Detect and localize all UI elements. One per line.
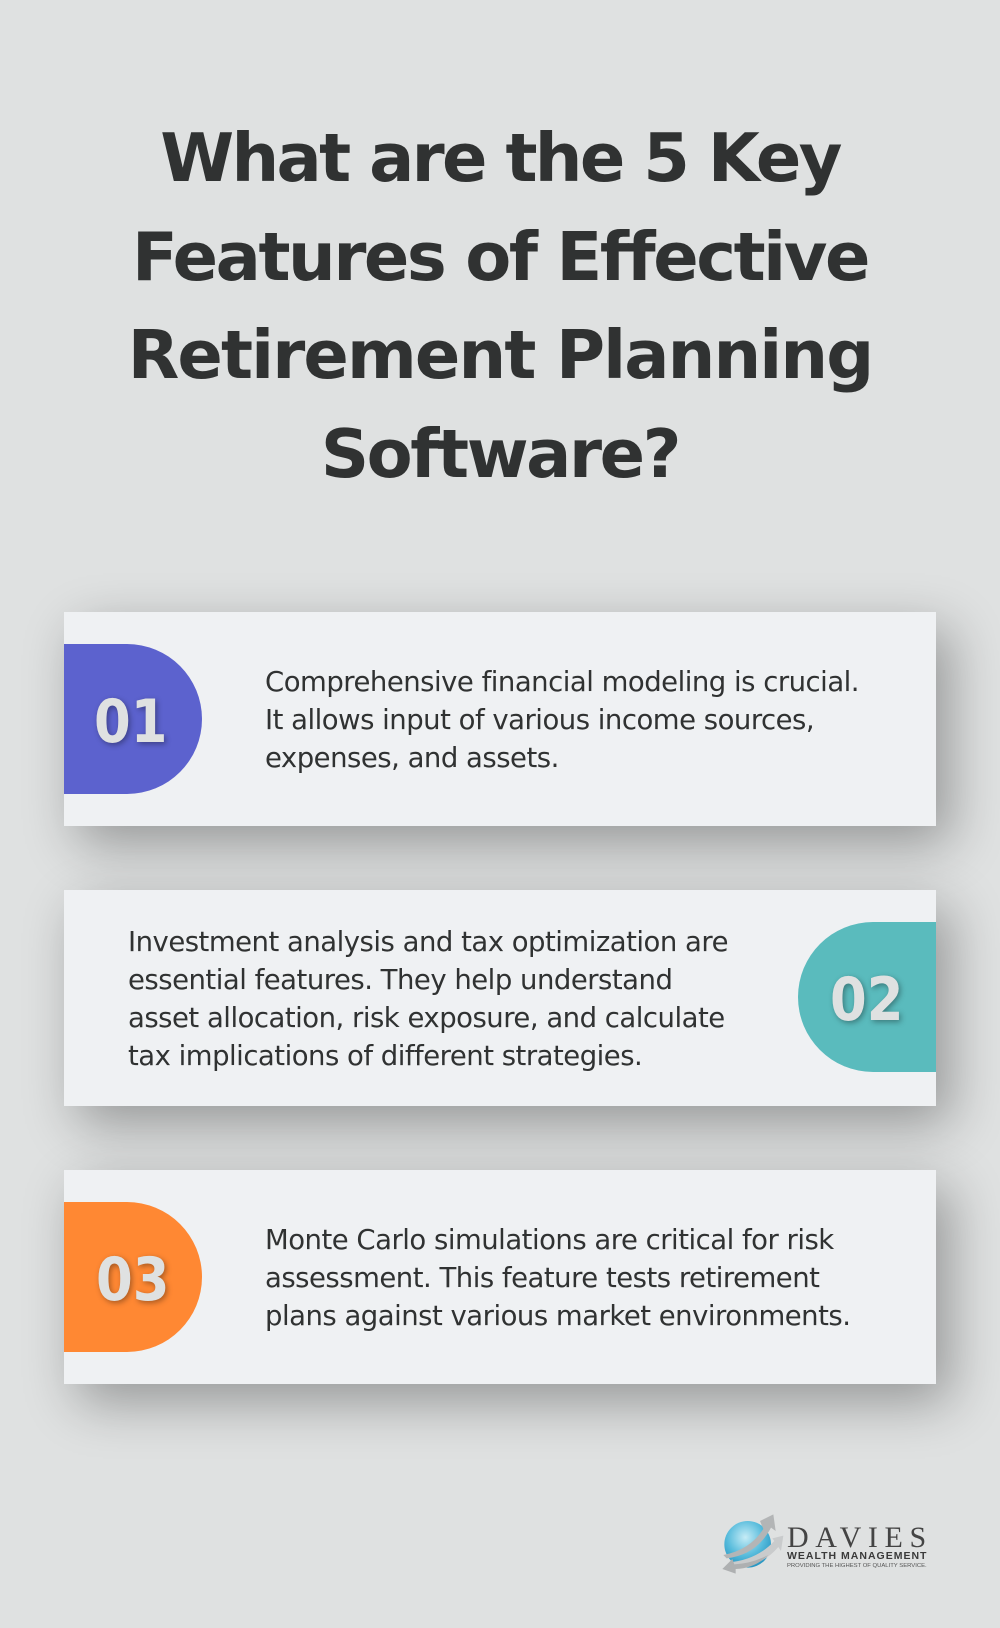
text 03: assessment. This feature tests retirement xyxy=(265,1262,819,1294)
title: Features of Effective xyxy=(132,218,868,296)
text 01: Comprehensive financial modeling is crucial. xyxy=(265,666,859,698)
title: What are the 5 Key xyxy=(160,119,840,197)
subtitle: WEALTH MANAGEMENT xyxy=(787,1550,927,1562)
text 03: plans against various market environments. xyxy=(265,1300,850,1332)
badge 02 xyxy=(798,922,936,1072)
text 02: tax implications of different strategies. xyxy=(128,1040,642,1072)
panel: feature 02 xyxy=(64,890,936,1106)
badge 03 xyxy=(64,1202,202,1352)
text 01 xyxy=(265,666,859,774)
text 02: essential features. They help understand xyxy=(128,964,672,996)
text 02: Investment analysis and tax optimization are xyxy=(128,926,728,958)
text 01: It allows input of various income sources, xyxy=(265,704,814,736)
title: Software? xyxy=(321,414,679,492)
badge 01: 01 xyxy=(94,687,168,757)
text 03: Monte Carlo simulations are critical for risk xyxy=(265,1224,834,1256)
panel: feature 01 xyxy=(64,612,936,826)
wordmark: DAVIES xyxy=(787,1521,933,1554)
title: Retirement Planning xyxy=(128,316,872,394)
badge 01 xyxy=(64,644,202,794)
text 02 xyxy=(128,926,728,1072)
icon: globe with arrows xyxy=(722,1514,784,1574)
text 02: asset allocation, risk exposure, and calculate xyxy=(128,1002,725,1034)
tagline: PROVIDING THE HIGHEST OF QUALITY SERVICE. xyxy=(787,1563,927,1569)
logo: Davies Wealth Management xyxy=(722,1514,933,1574)
title xyxy=(128,119,872,492)
badge 03: 03 xyxy=(96,1245,169,1315)
badge 02: 02 xyxy=(830,965,904,1035)
text 03 xyxy=(265,1224,850,1332)
text 01: expenses, and assets. xyxy=(265,742,559,774)
panel: feature 03 xyxy=(64,1170,936,1384)
